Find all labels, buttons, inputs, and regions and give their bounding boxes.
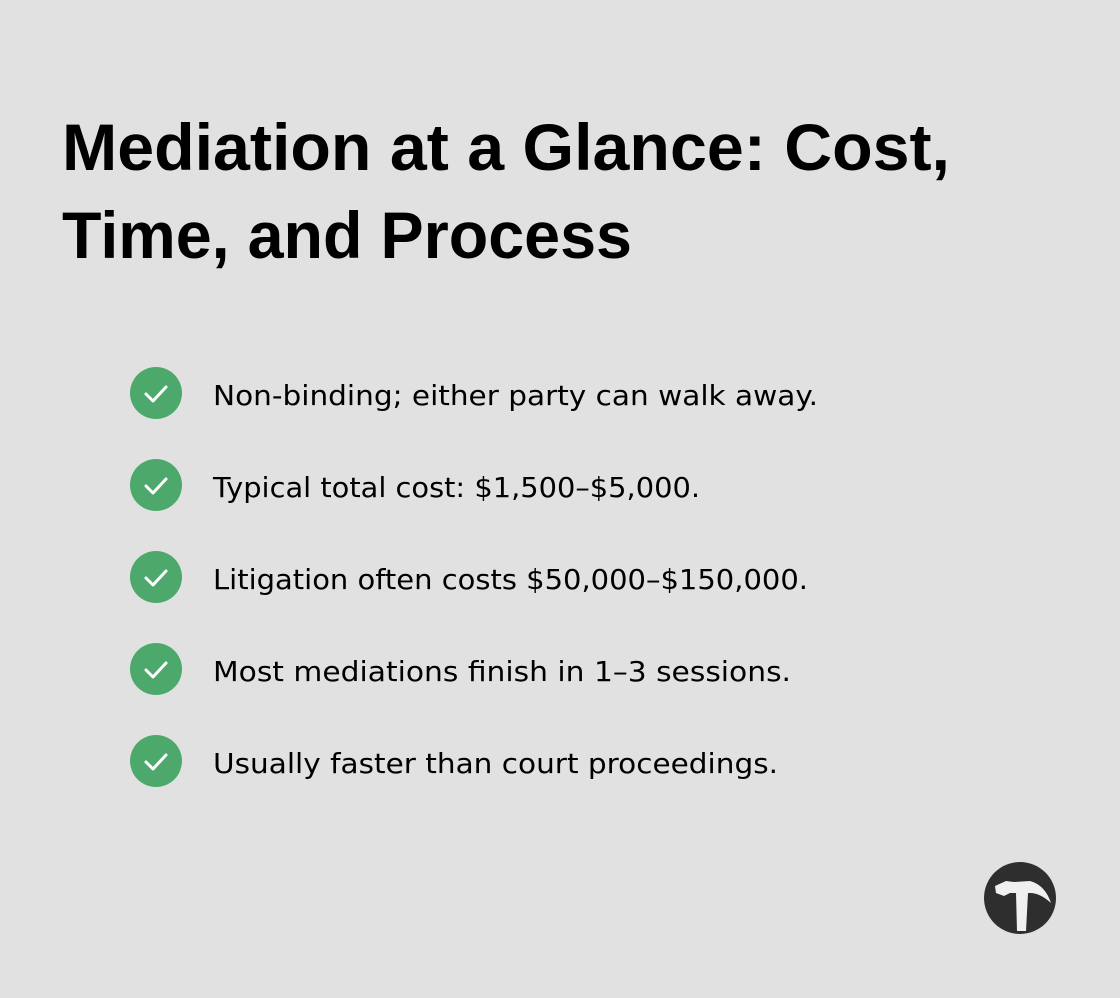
item 4 [130,643,791,695]
item 3: Litigation often costs $50,000–$150,000. [213,563,808,596]
icon: hammer logo [984,862,1056,934]
item 3 [130,551,808,603]
title [62,110,950,272]
item 2 [130,459,700,511]
item 5 [130,735,778,787]
title: Time, and Process [62,198,632,272]
title: Mediation at a Glance: Cost, [62,110,950,184]
checklist [130,367,818,787]
item 4: Most mediations finish in 1–3 sessions. [213,655,791,688]
item 1 [130,367,818,419]
item 2: Typical total cost: $1,500–$5,000. [212,471,700,504]
item 5: Usually faster than court proceedings. [213,747,778,780]
item 1: Non-binding; either party can walk away. [213,379,818,412]
